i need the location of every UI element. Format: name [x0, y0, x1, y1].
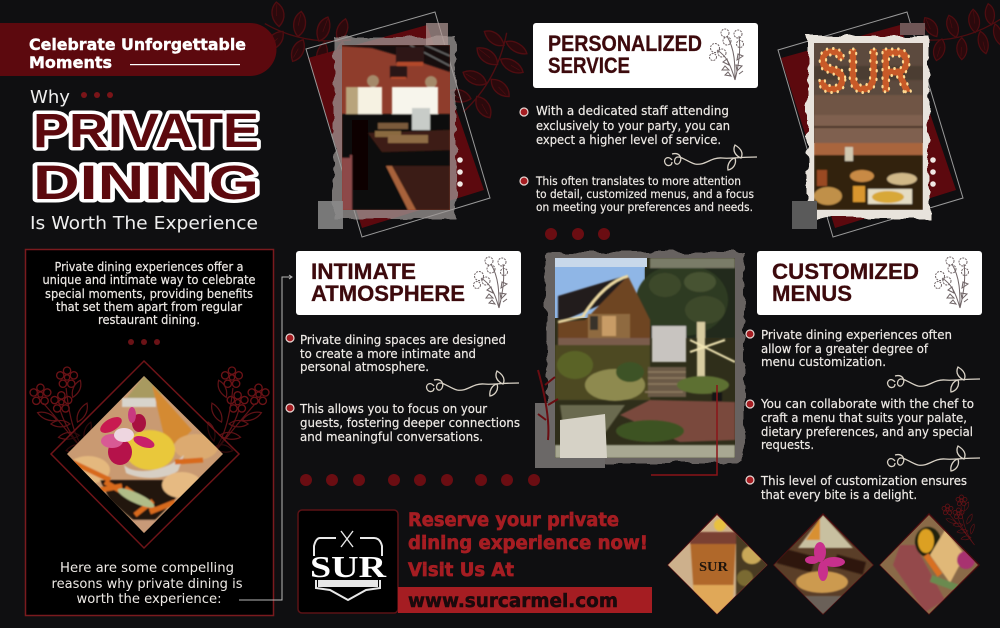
- closing intro text: Here are some compelling: [60, 560, 234, 576]
- title banner: [0, 23, 277, 76]
- floral left: [30, 367, 92, 462]
- second bullet: [286, 404, 294, 412]
- icon: flower sprig: [710, 29, 744, 80]
- text block: customized menus: You can collaborate with the chef to: [760, 396, 974, 411]
- banner text second line: Moments: [29, 53, 112, 72]
- intro text: unique and intimate way to celebrate: [42, 272, 256, 287]
- orchid: [98, 407, 156, 465]
- text block: intimate atmosphere: Private dining spaces are designed: [300, 332, 506, 347]
- swirl ornament: [888, 446, 980, 471]
- text block: customized menus: allow for a greater degree of: [761, 341, 929, 356]
- text block: intimate atmosphere: to create a more intimate and: [300, 346, 476, 361]
- grey torn frame: [334, 37, 456, 219]
- banner text: Celebrate Unforgettable: [29, 35, 246, 54]
- floral right: [207, 367, 269, 462]
- text block: intimate atmosphere: This allows you to focus on your: [299, 401, 488, 416]
- diamond: seared tuna: [879, 513, 980, 615]
- diamond outline: [51, 361, 239, 548]
- banner rule: [130, 64, 240, 65]
- call to action: Reserve your private: [408, 509, 619, 531]
- orchid: [805, 542, 845, 581]
- translucent top square: [900, 23, 925, 35]
- text block: intimate atmosphere: guests, fostering deeper connections: [300, 415, 520, 430]
- logo word: SUR: [310, 549, 387, 584]
- text block: personalized service: This often translates to more attention: [535, 174, 741, 188]
- background leaf branch: top right: [919, 0, 1000, 67]
- text block: customized menus: menu customization.: [761, 354, 886, 369]
- card: intimate atmosphere: [296, 251, 521, 315]
- grey corner square: [792, 201, 817, 229]
- DINING: DINING: [33, 157, 259, 210]
- floral decoration lower right: [942, 495, 974, 545]
- tilted outline: [306, 12, 490, 237]
- call to action: [398, 509, 652, 613]
- card title: INTIMATE: [311, 259, 416, 284]
- diamond food photo: [67, 376, 223, 533]
- intro text: that set them apart from regular: [56, 299, 243, 314]
- translucent corner squares: [318, 201, 343, 229]
- text block: customized menus: requests.: [761, 437, 814, 452]
- text block: customized menus: This level of customization ensures: [760, 473, 967, 488]
- background leaf branch: top centre-left: [258, 1, 355, 72]
- pale top band: [555, 258, 647, 267]
- glass label: SUR: [699, 560, 729, 575]
- icon: flower sprig: [934, 257, 968, 308]
- card title second line: ATMOSPHERE: [311, 281, 465, 306]
- url bar: [398, 587, 652, 613]
- panel: introduction: [26, 250, 274, 616]
- main heading: [30, 87, 259, 234]
- text block: customized menus: craft a menu that suits your palate,: [761, 410, 967, 425]
- heading dots: [81, 92, 113, 98]
- text block: customized menus: [746, 327, 980, 502]
- photo frame: restaurant exterior: [535, 252, 744, 475]
- background leaf branch: centre top: [443, 22, 536, 128]
- second bullet: [746, 400, 754, 408]
- text block: personalized service: expect a higher level of service.: [536, 132, 721, 147]
- swirl ornament: [427, 371, 519, 396]
- photo frame: restaurant interior: [306, 12, 490, 237]
- text block: customized menus: that every bite is a delight.: [761, 487, 917, 502]
- diamond: iced drink: [667, 513, 768, 615]
- url: www.surcarmel.com: [408, 590, 618, 612]
- second bullet: [520, 177, 528, 185]
- call to action: dining experience now!: [408, 532, 648, 554]
- arrow: intro to cards: [239, 275, 292, 600]
- tilted outline: [778, 12, 963, 237]
- card: personalized service: [533, 23, 758, 88]
- intro text: Private dining experiences offer a: [54, 259, 244, 274]
- text block: personalized service: on meeting your preferences and needs.: [536, 200, 753, 214]
- logo ribbon: [318, 580, 378, 587]
- interior photo: [342, 45, 450, 210]
- PRIVATE: PRIVATE: [33, 105, 259, 158]
- intro text: [42, 259, 256, 327]
- dots: row under text: [300, 474, 540, 486]
- dots: top centre: [545, 228, 610, 240]
- text block: customized menus: Private dining experiences often: [761, 327, 952, 342]
- fork and knife: [341, 531, 353, 547]
- third bullet: [746, 476, 754, 484]
- card title: CUSTOMIZED: [772, 259, 919, 284]
- text block: personalized service: to detail, customized menus, and a focus: [536, 187, 754, 201]
- white dots: [930, 157, 936, 187]
- text block: personalized service: [520, 103, 757, 214]
- cream frame: [807, 36, 929, 218]
- text block: intimate atmosphere: personal atmosphere.: [300, 359, 429, 374]
- red twig overlay: [538, 370, 558, 440]
- logo badge outline: [314, 538, 382, 600]
- heading subtitle: Is Worth The Experience: [30, 213, 258, 234]
- intro text: restaurant dining.: [98, 312, 200, 327]
- intro text: special moments, providing benefits: [45, 286, 253, 301]
- exterior photo: [555, 258, 735, 458]
- white dots: [457, 157, 463, 187]
- visit label: Visit Us At: [408, 559, 514, 581]
- swirl ornament: [888, 367, 980, 392]
- card title: PERSONALIZED: [548, 31, 702, 56]
- closing intro text: reasons why private dining is: [52, 576, 242, 592]
- diamond: orchid plate: [773, 513, 874, 615]
- red connector line: [651, 385, 717, 475]
- text block: intimate atmosphere: and meaningful conversations.: [300, 429, 483, 444]
- logo box: SUR: [298, 510, 398, 613]
- main heading: Why: [30, 87, 70, 108]
- card: customized menus: [757, 251, 982, 315]
- card title second line: SERVICE: [548, 53, 630, 78]
- intro dots: [128, 339, 160, 345]
- SUR sign photo: [814, 37, 923, 210]
- text block: personalized service: With a dedicated staff attending: [536, 103, 729, 118]
- closing intro text: worth the experience:: [76, 591, 222, 607]
- card title second line: MENUS: [772, 281, 852, 306]
- photo frame: SUR sign: [778, 12, 963, 237]
- icon: flower sprig: [474, 257, 508, 308]
- swirl ornament: [665, 145, 757, 170]
- closing intro text: [52, 560, 242, 607]
- text block: customized menus: dietary preferences, and any special: [761, 424, 973, 439]
- text block: personalized service: exclusively to your party, you can: [536, 118, 730, 133]
- sign letters: SUR: [817, 37, 912, 106]
- text block: intimate atmosphere: [286, 332, 520, 444]
